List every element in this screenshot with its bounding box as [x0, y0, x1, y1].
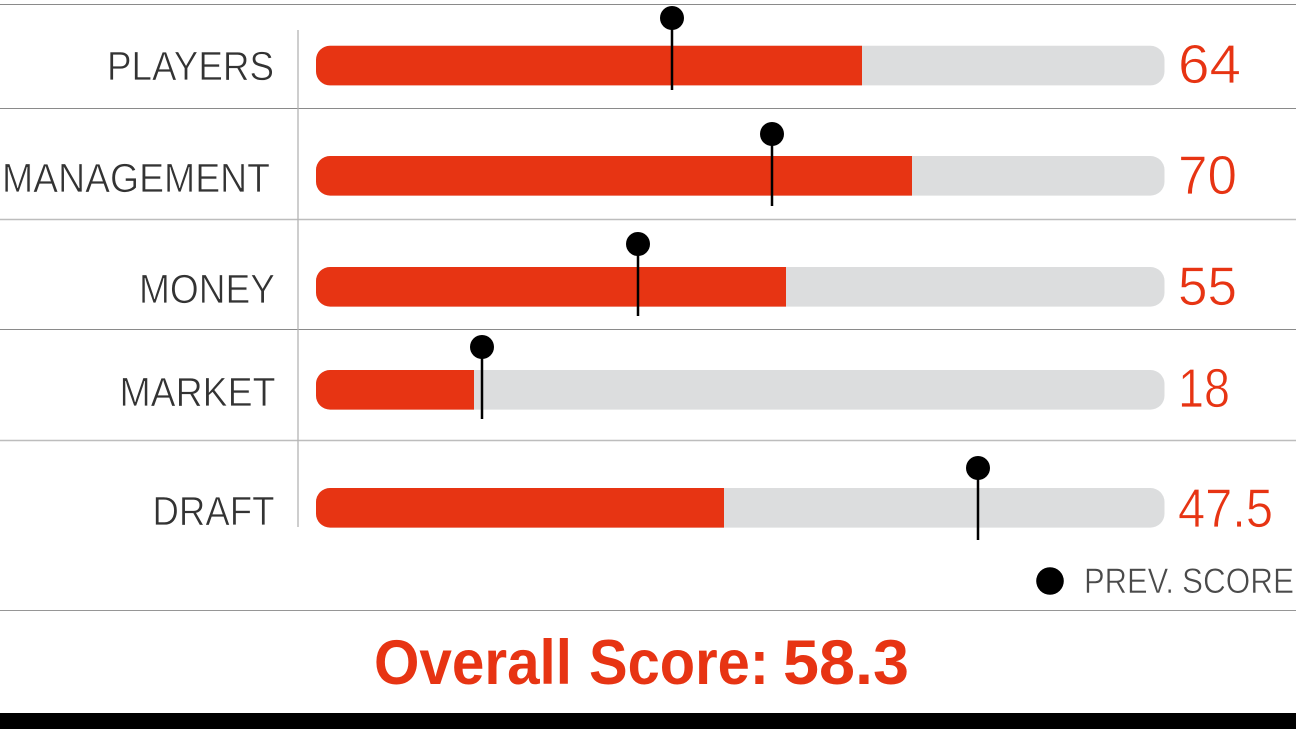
bar: players 64 — [316, 46, 1164, 85]
row: players — [107, 6, 1241, 95]
bar: money 55 — [316, 267, 1164, 307]
value: money: 55 — [1178, 255, 1237, 317]
marker: money previous score — [626, 232, 650, 316]
overall score — [374, 628, 909, 698]
row: market — [120, 335, 1230, 419]
bar: market 18 — [316, 370, 1164, 410]
row: management — [2, 122, 1237, 206]
bar: management 70 — [316, 156, 1164, 196]
marker: market previous score — [470, 335, 494, 419]
legend: previous score — [1036, 562, 1294, 601]
bottom black band — [0, 713, 1296, 729]
label: draft: DRAFT — [152, 488, 274, 534]
label: market: MARKET — [120, 369, 276, 415]
overall score: 58.3 — [783, 628, 909, 698]
overall score: Overall — [374, 628, 572, 698]
value: draft: 47.5 — [1178, 477, 1273, 539]
value: market: 18 — [1178, 357, 1230, 419]
label: players: PLAYERS — [107, 43, 274, 89]
row: draft — [152, 456, 1273, 540]
marker: players previous score — [660, 6, 684, 90]
label: management: MANAGEMENT — [2, 155, 270, 201]
overall score: Score: — [589, 628, 769, 698]
value: management: 70 — [1178, 144, 1237, 206]
marker: management previous score — [760, 122, 784, 206]
marker: draft previous score — [966, 456, 990, 540]
label: money: MONEY — [139, 266, 275, 312]
bar: draft 47.5 — [316, 488, 1164, 528]
legend: previous score: PREV. — [1084, 562, 1174, 601]
value: players: 64 — [1178, 33, 1241, 95]
row: money — [139, 232, 1237, 317]
